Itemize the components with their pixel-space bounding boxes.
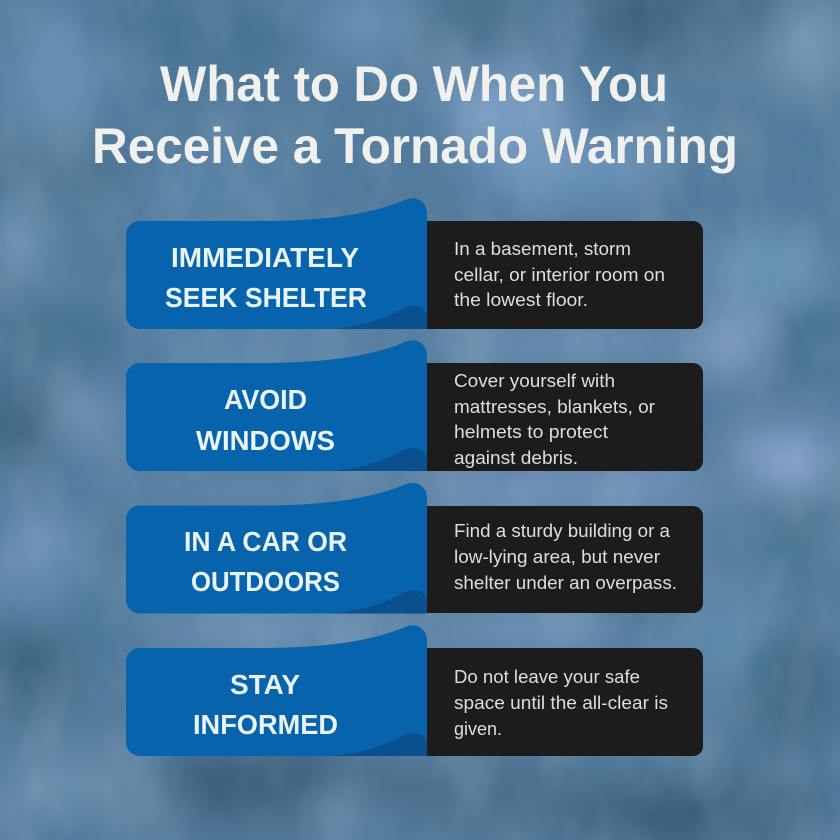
blue ribbon xyxy=(126,198,427,329)
panel: avoid windows xyxy=(126,340,703,471)
heading: SEEK SHELTER xyxy=(165,282,367,313)
blue ribbon xyxy=(126,625,427,756)
heading: WINDOWS xyxy=(196,425,335,456)
title: Receive a Tornado Warning xyxy=(92,118,738,174)
description: Find a sturdy building or a xyxy=(454,520,671,541)
description: mattresses, blankets, or xyxy=(454,396,655,417)
description panel background xyxy=(415,363,703,471)
description: Cover yourself with xyxy=(454,370,615,391)
panel: immediately seek shelter xyxy=(126,198,703,329)
description: helmets to protect xyxy=(454,421,608,442)
heading: IMMEDIATELY xyxy=(171,242,359,273)
heading: INFORMED xyxy=(193,709,338,740)
description: cellar, or interior room on xyxy=(454,264,665,285)
description: Do not leave your safe xyxy=(454,666,640,687)
description: low-lying area, but never xyxy=(454,546,660,567)
description panel background xyxy=(415,648,703,756)
title xyxy=(92,56,738,174)
heading: IN A CAR OR xyxy=(184,526,347,557)
description xyxy=(454,520,677,593)
heading xyxy=(165,242,367,313)
description xyxy=(454,238,665,310)
heading xyxy=(193,669,338,740)
description panel background xyxy=(415,506,703,613)
heading: AVOID xyxy=(224,384,307,415)
description xyxy=(454,370,655,468)
description: space until the all-clear is xyxy=(454,692,668,713)
description panel background xyxy=(415,221,703,329)
blue ribbon xyxy=(126,483,427,614)
heading: OUTDOORS xyxy=(191,566,340,597)
description xyxy=(454,666,668,739)
description: In a basement, storm xyxy=(454,238,631,259)
blue ribbon xyxy=(126,340,427,471)
heading xyxy=(184,526,347,597)
description: given. xyxy=(454,718,502,739)
panel: stay informed xyxy=(126,625,703,756)
description: against debris. xyxy=(454,447,578,468)
title: What to Do When You xyxy=(160,56,668,112)
description: shelter under an overpass. xyxy=(454,572,677,593)
heading xyxy=(196,384,335,456)
description: the lowest floor. xyxy=(454,289,588,310)
heading: STAY xyxy=(230,669,300,700)
panel: in a car or outdoors xyxy=(126,483,703,614)
